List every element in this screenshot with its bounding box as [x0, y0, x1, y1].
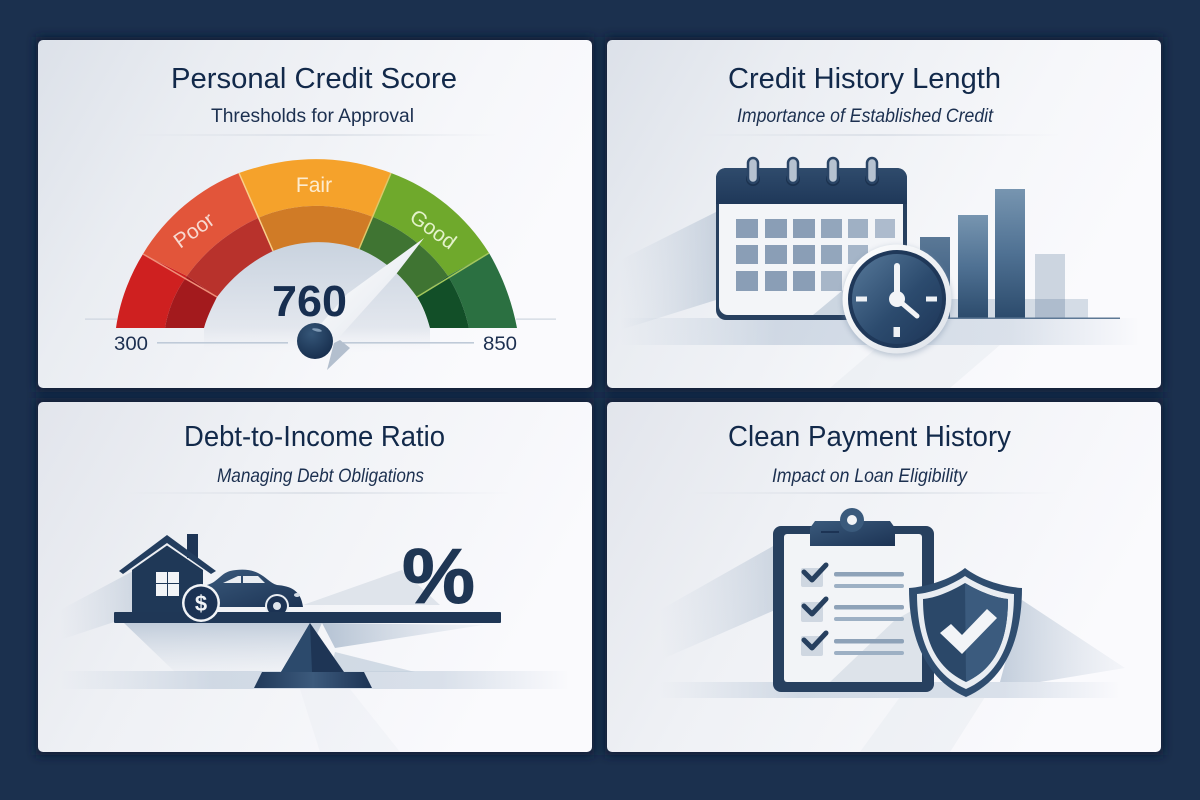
checklist row 3 — [801, 633, 904, 656]
gauge — [116, 159, 517, 352]
icon: dollar coin: $ — [195, 591, 207, 616]
icon: clock — [842, 244, 952, 356]
icon: shield — [909, 568, 1022, 697]
title: clean payment history: Clean Payment History — [728, 421, 1011, 453]
panel: clean payment history — [607, 402, 1161, 752]
checklist row 1 — [801, 565, 904, 588]
score value: 760 — [272, 277, 347, 326]
gauge segment: deep red — [116, 254, 217, 328]
label: poor: Poor — [169, 208, 219, 253]
title: personal credit score: Personal Credit Score — [171, 63, 457, 95]
gauge segment: fair — [239, 159, 391, 251]
icon: house — [119, 534, 216, 612]
label: good: Good — [405, 205, 460, 254]
icon: dollar coin — [182, 584, 220, 622]
subtitle: impact on loan eligibility: Impact on Loan Eligibility — [772, 466, 968, 487]
gauge segment: poor — [143, 173, 273, 297]
label: fair: Fair — [296, 174, 332, 197]
icon: calendar — [716, 158, 907, 320]
icon: balance scale — [114, 612, 501, 688]
gauge segment: good — [359, 173, 489, 297]
panel: credit history length — [607, 40, 1161, 388]
icon: clipboard — [773, 508, 934, 692]
icon: car — [200, 570, 303, 618]
bar chart — [900, 189, 1120, 319]
panel: personal credit score — [38, 40, 592, 388]
panel: debt-to-income ratio — [38, 402, 592, 752]
subtitle: importance of established credit: Importance of Established Credit — [737, 106, 994, 127]
gauge segment: excellent — [417, 253, 517, 328]
subtitle: managing debt obligations: Managing Debt Obligations — [217, 466, 424, 487]
subtitle: thresholds for approval: Thresholds for Approval — [211, 106, 414, 127]
checklist row 2 — [801, 599, 904, 622]
needle — [320, 238, 424, 370]
needle hub — [297, 323, 333, 359]
scale minimum: 300 — [114, 334, 148, 355]
title: debt-to-income ratio: Debt-to-Income Ratio — [184, 421, 445, 453]
scale maximum: 850 — [483, 334, 517, 355]
icon: percent sign: % — [402, 532, 475, 620]
title: credit history length: Credit History Length — [728, 63, 1001, 95]
